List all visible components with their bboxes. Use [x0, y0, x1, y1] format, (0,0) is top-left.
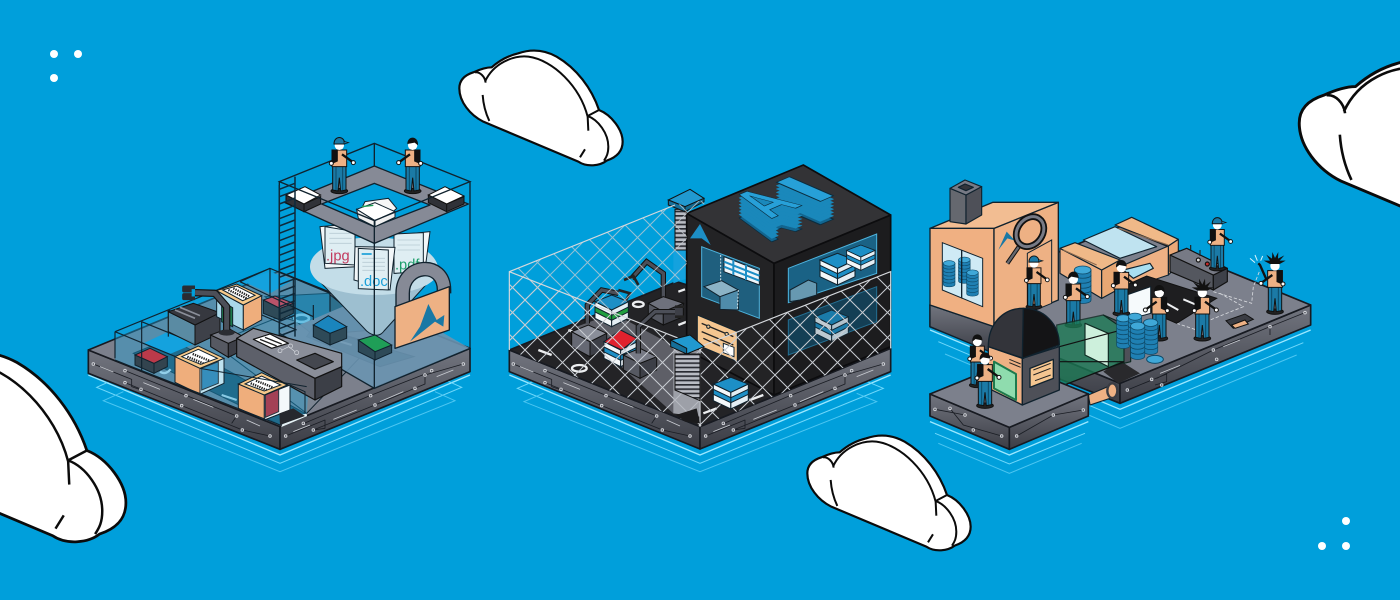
glass cells grid: [115, 268, 330, 372]
worker kiosk front: [975, 352, 1001, 408]
main slab rails: [932, 311, 1306, 391]
block: centre: [623, 348, 657, 378]
front glass lines: [115, 360, 307, 425]
floor markings: [538, 289, 763, 413]
worker spiky hair right: [1250, 252, 1286, 314]
cloud: top centre: [459, 51, 623, 165]
small slab: [930, 362, 1088, 449]
worker at console: [1208, 218, 1233, 271]
funnel: [310, 237, 438, 335]
right window: [788, 234, 877, 303]
disc stack by crates: [1074, 266, 1091, 303]
block: left: [572, 325, 607, 357]
roof letters: I: [757, 185, 854, 227]
orange box left: [175, 346, 224, 394]
tall box floor: [279, 293, 470, 388]
blue stack front: [713, 377, 748, 409]
worker with cap: [329, 137, 355, 194]
roof letters: [713, 168, 854, 248]
magnifying glass: [1007, 211, 1050, 263]
decorative dots top left: [50, 50, 82, 82]
logo on building: [998, 232, 1015, 250]
scene 1: document storage platform: [88, 137, 470, 472]
scene 3: inspection platform: [930, 180, 1311, 473]
grey block: [168, 303, 220, 345]
roof letters: A: [713, 203, 817, 248]
back louver post: [668, 189, 704, 250]
stack: green: [358, 335, 392, 360]
main slab: [930, 227, 1311, 403]
orange control panel: [697, 315, 737, 362]
red stack: [604, 330, 637, 367]
roof letters: I: [757, 178, 854, 220]
building window: [942, 243, 983, 307]
console with buttons: [1170, 245, 1227, 290]
blue stack behind fence: [815, 310, 848, 342]
dark floor corner: [279, 408, 305, 425]
water reflection lines: [930, 330, 1311, 473]
worker in doorway: [1024, 256, 1049, 309]
worker kiosk rear: [968, 334, 993, 388]
roof letters: I: [757, 168, 854, 210]
roof letters: A: [713, 197, 817, 242]
stack: blue: [313, 316, 347, 345]
floor network lines: [1177, 270, 1260, 330]
padlock: [395, 269, 449, 348]
left window: [702, 247, 759, 318]
paper: pdf: [394, 232, 430, 273]
sky window behind: [673, 247, 687, 283]
console: [237, 328, 342, 400]
open crate: [1226, 314, 1253, 328]
worker with hair: [397, 138, 423, 194]
roof letters: A: [713, 187, 817, 232]
chimney: [950, 180, 982, 224]
paper: jpg: .jpg: [326, 248, 350, 264]
cloud: bottom centre: [807, 436, 971, 550]
water reflection lines: [509, 375, 891, 472]
roof letters: A: [713, 190, 817, 235]
roof letters: I: [757, 188, 854, 230]
roof letters: A: [713, 180, 817, 225]
building: [930, 202, 1058, 353]
fence frame: [509, 205, 891, 427]
stack: red: [135, 348, 167, 373]
roof letters: A: [713, 183, 817, 228]
conveyor markings: [1163, 299, 1197, 310]
white document: [1127, 287, 1151, 320]
grey floor panel: [577, 313, 700, 417]
paper: jpg: [320, 224, 358, 268]
front-right fence: [700, 272, 891, 427]
robot arm: left: [587, 290, 630, 323]
worker with disc stack: [1063, 272, 1089, 328]
back-left fence: [509, 198, 715, 350]
glass box frame: [279, 143, 470, 388]
connector pipe: [1088, 383, 1117, 405]
rear crates and glass top: [1060, 217, 1178, 298]
paper: doc: .doc: [360, 274, 388, 290]
front post: [671, 335, 704, 423]
stack: red back: [263, 296, 293, 320]
orange box front: [238, 373, 290, 420]
cloud: right edge: [1299, 58, 1400, 257]
roof letters: I: [757, 182, 854, 224]
paper: pdf: .pdf: [395, 257, 420, 273]
paper stack on platform: [357, 198, 397, 227]
worker near document: [1143, 285, 1169, 341]
front-left fence: [509, 272, 700, 427]
green stack: [595, 295, 628, 327]
building door: [1027, 240, 1052, 313]
block under arm: [211, 328, 243, 357]
roof letters: I: [757, 172, 854, 214]
logo on wall: [690, 224, 711, 245]
orange box back: [217, 284, 262, 330]
ladder: [279, 177, 295, 340]
dome kiosk: [988, 308, 1059, 405]
robot arm: centre: [638, 307, 684, 353]
left glass area floor: [133, 293, 414, 425]
black conveyor floor: [1127, 276, 1217, 323]
roof letters: I: [757, 192, 854, 234]
roof letters: A: [713, 193, 817, 238]
block: rear: [648, 297, 683, 325]
glass tint over left cells: [115, 268, 330, 425]
lower right window: [788, 287, 877, 355]
building: [687, 165, 891, 395]
robot arm: [184, 287, 235, 336]
bright sky seen through glass: [143, 272, 293, 354]
roof letters: A: [713, 200, 817, 245]
dark floor: [1103, 361, 1140, 383]
slab: [88, 272, 470, 449]
robot arm: rear: [624, 262, 663, 297]
scene 2: AI building: [509, 165, 891, 472]
slab: [509, 282, 891, 449]
worker behind document: [1111, 260, 1137, 316]
paper: doc: [354, 247, 395, 290]
green glass chamber: [1057, 315, 1131, 387]
decorative dots bottom right: [1318, 517, 1350, 550]
cloud: left edge: [0, 353, 126, 542]
disc stacks: [1117, 313, 1163, 363]
top platform ring: [285, 166, 468, 243]
roof letters: I: [757, 175, 854, 217]
water reflection lines: [88, 375, 470, 472]
paper stacks on corners: [286, 187, 464, 212]
worker spiky hair centre: [1192, 279, 1218, 341]
small slab rails: [934, 407, 1085, 437]
